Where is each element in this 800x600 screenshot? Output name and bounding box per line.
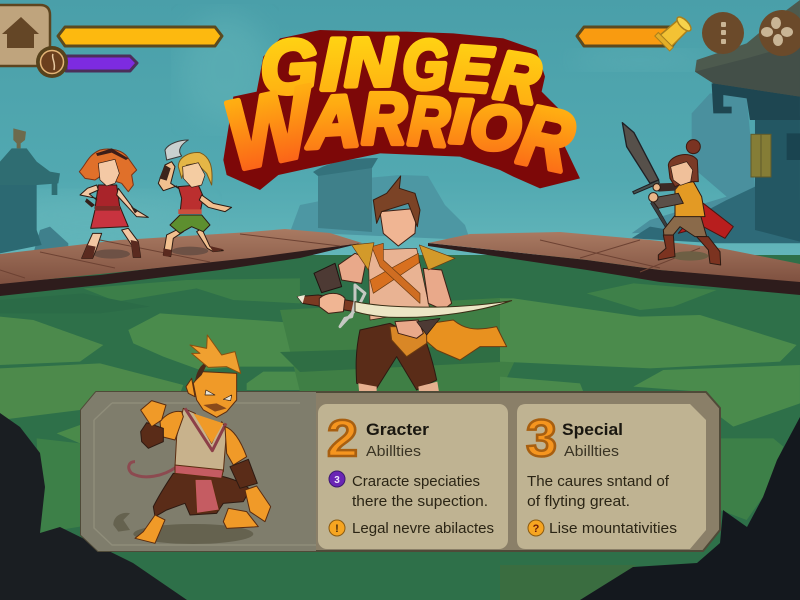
title: GINGER WARRIOR: I (449, 87, 473, 157)
right pagoda (632, 0, 800, 243)
card: Special abilities (517, 404, 706, 549)
icon: orange badge (329, 520, 345, 536)
card text line 3: Legal nevre abilactes (352, 520, 494, 537)
title: GINGER WARRIOR: O (471, 94, 521, 163)
card text: The caures sntand of (527, 473, 670, 490)
yellow health bar (58, 27, 222, 46)
menu button (702, 12, 744, 54)
title: GINGER WARRIOR: R (490, 37, 545, 119)
home button (0, 5, 50, 66)
icon: purple badge (329, 471, 345, 487)
title: GINGER WARRIOR: R (362, 78, 407, 159)
icon: question badge: ? (533, 523, 540, 535)
numeral 2: 2 (327, 410, 358, 468)
card heading: Special (562, 420, 623, 439)
round timer badge (36, 46, 68, 78)
icon: scroll (655, 15, 693, 51)
card text line 2: of flyting great. (527, 493, 630, 510)
title: GINGER WARRIOR: R (407, 83, 451, 161)
title: GINGER WARRIOR: A (303, 80, 362, 164)
icon: question badge (528, 520, 544, 536)
character: blond fighter (158, 140, 232, 257)
character: red-haired fighter (79, 148, 148, 259)
icon: house (2, 17, 39, 48)
title: GINGER WARRIOR: G (403, 27, 448, 103)
numeral 3: 3 (526, 410, 557, 468)
ground (0, 255, 800, 600)
character: warrior with sword, right (622, 123, 733, 265)
orange progress bar (577, 27, 680, 46)
monkey character (113, 335, 271, 544)
dark rocks, bottom corners (0, 413, 800, 600)
title: GINGER WARRIOR: R (511, 87, 581, 191)
title: GINGER WARRIOR: W (215, 65, 328, 191)
card text line 2: there the supection. (352, 493, 488, 510)
card subheading: Abillties (564, 444, 619, 460)
title: GINGER WARRIOR: E (449, 33, 495, 106)
right platform (428, 232, 800, 295)
controls button (759, 10, 800, 56)
background: mountains (290, 175, 470, 240)
card heading: Gracter (366, 420, 429, 439)
title: GINGER WARRIOR: N (344, 24, 399, 101)
card text line 3: Lise mountativities (549, 520, 677, 537)
card subheading: Abillties (366, 444, 421, 460)
stone info panel (81, 335, 720, 551)
left platform (0, 229, 362, 296)
icon: purple badge: 3 (334, 475, 340, 486)
title: GINGER WARRIOR: G (258, 23, 319, 110)
card: Gracter abilities (318, 404, 508, 549)
background: sky (0, 0, 800, 300)
background: central tower (313, 158, 378, 232)
left pagoda (0, 128, 68, 253)
title: GINGER WARRIOR: I (321, 23, 344, 105)
title: GINGER WARRIOR (215, 23, 581, 191)
icon: orange badge: ! (335, 523, 339, 535)
purple energy bar (66, 56, 137, 71)
hero with curved sword (297, 176, 512, 394)
card text: Craracte speciaties (352, 473, 480, 490)
